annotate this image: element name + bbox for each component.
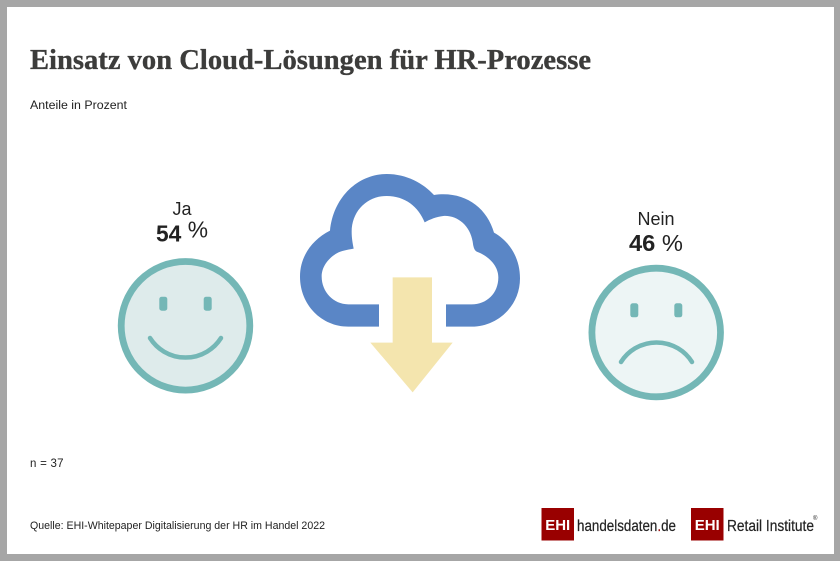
- value: 54 percent: 54: [156, 220, 182, 246]
- logo: EHI Retail Institute: [691, 508, 818, 540]
- download arrow: [370, 277, 453, 392]
- logo: EHI Retail Institute: EHI: [695, 517, 720, 534]
- sample size: n = 37: [30, 458, 64, 470]
- panel: yes answer: [121, 199, 250, 390]
- value: 46 percent: 46 %: [629, 230, 683, 256]
- icon: sad face: [592, 268, 720, 397]
- subtitle: Anteile in Prozent: [30, 100, 128, 112]
- icon: smiling face: [121, 262, 250, 390]
- cloud outline: [300, 174, 520, 327]
- logo: EHI handelsdaten.de: EHI: [545, 517, 570, 534]
- panel: no answer: [592, 209, 720, 397]
- logo: EHI handelsdaten.de: [542, 508, 676, 540]
- icon: cloud download: [300, 174, 520, 392]
- title: Einsatz von Cloud-Lösungen für HR-Prozesse: [30, 44, 591, 76]
- logo: EHI Retail Institute: Retail Institute: [727, 518, 814, 535]
- label: Nein: Nein: [637, 209, 675, 229]
- source: Quelle: EHI-Whitepaper Digitalisierung der HR im Handel 2022: [30, 520, 325, 532]
- label: Ja: Ja: [172, 199, 192, 219]
- logo: EHI Retail Institute: ®: [813, 515, 818, 522]
- value: 54 percent: %: [188, 216, 208, 242]
- logo: EHI handelsdaten.de: handelsdaten.de: [577, 518, 676, 535]
